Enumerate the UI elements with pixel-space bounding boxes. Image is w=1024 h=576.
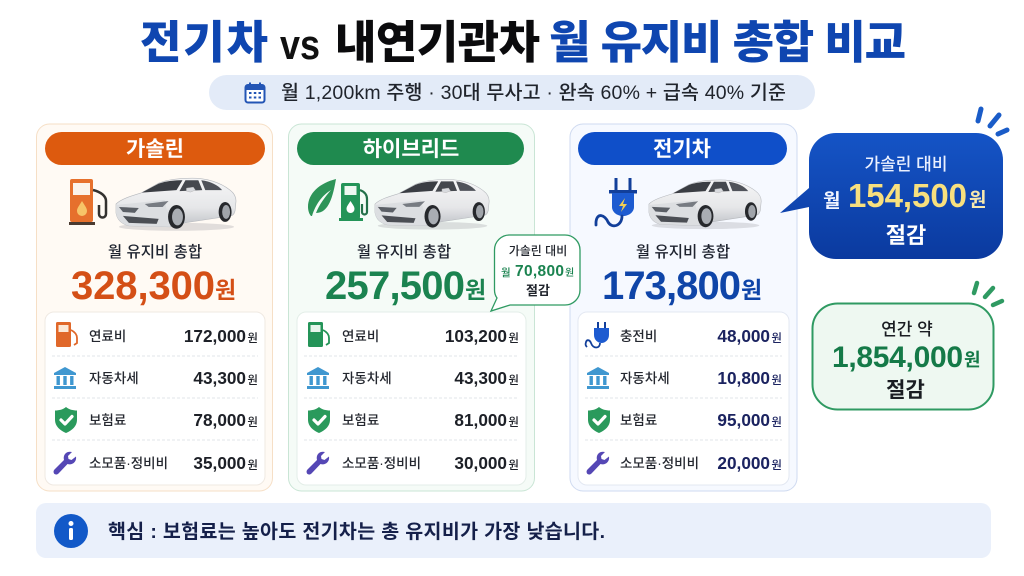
label: 월 유지비 총합: [357, 243, 451, 261]
row: insurance: [55, 407, 258, 433]
total electric: 173,800: [602, 264, 741, 308]
car image: [649, 180, 761, 229]
row: fuel: 원: [508, 331, 519, 345]
row: maintenance: [307, 452, 519, 475]
title: 월 유지비 총합 비교: [549, 17, 906, 68]
total gasoline: 328,300: [71, 264, 215, 308]
icon: plug: [596, 178, 637, 226]
row: insurance: 보험료: [342, 413, 379, 428]
row: charging: 충전비: [620, 329, 657, 344]
cost table electric: [578, 312, 789, 485]
callout: electric monthly saving: 절감: [886, 223, 926, 248]
row: charging: 원: [771, 331, 782, 345]
row: fuel: 연료비: [89, 329, 126, 344]
callout: hybrid saving: 가솔린 대비: [509, 244, 567, 258]
sparkle: green: [974, 283, 1002, 305]
callout: electric monthly saving: 월: [823, 190, 840, 212]
row: fuel: 원: [247, 331, 258, 345]
gasoline heading pill: 가솔린: [126, 138, 184, 161]
row: fuel: 연료비: [342, 329, 379, 344]
row: fuel: 103,200: [445, 326, 507, 346]
row: maintenance: 원: [247, 458, 258, 472]
row: car tax: 43,300: [454, 368, 507, 388]
row: car tax: 자동차세: [89, 371, 139, 386]
callout: electric monthly saving: 원: [969, 189, 986, 211]
sparkle: blue: [978, 109, 1007, 134]
icon: calendar: [246, 82, 264, 102]
row: car tax: 10,800: [717, 368, 770, 388]
row: car tax: [54, 367, 258, 389]
callout: electric monthly saving: 가솔린 대비: [865, 155, 947, 174]
row: maintenance: 소모품·정비비: [342, 456, 421, 471]
total electric: 원: [741, 277, 762, 303]
callout: hybrid saving: 절감: [526, 283, 550, 298]
row: insurance: 보험료: [89, 413, 126, 428]
panel: hybrid: [288, 124, 534, 491]
key takeaway bar: [36, 503, 991, 558]
row: insurance: [308, 407, 519, 433]
hybrid heading pill: 하이브리드: [363, 138, 459, 161]
icon: fuel pump: [69, 179, 106, 225]
row: insurance: 81,000: [454, 410, 507, 430]
callout: electric monthly saving: [780, 133, 1003, 259]
row: car tax: 자동차세: [620, 371, 670, 386]
total gasoline: 원: [215, 277, 236, 303]
subtitle text: 월 1,200km 주행 · 30대 무사고 · 완속 60% + 급속 40% 기준: [281, 82, 786, 104]
row: maintenance: 35,000: [193, 453, 246, 473]
row: car tax: 자동차세: [342, 371, 392, 386]
hybrid heading pill: [297, 132, 524, 165]
callout: annual saving: 원: [964, 350, 981, 370]
callout: hybrid saving: 원: [565, 266, 574, 279]
callout: hybrid saving: 월: [501, 267, 511, 279]
title: 전기차: [140, 17, 268, 68]
callout: hybrid saving: [491, 235, 580, 311]
row: charging: [586, 322, 782, 348]
label: 월 유지비 총합: [108, 243, 202, 261]
row: insurance: 78,000: [193, 410, 246, 430]
panel: electric: [570, 124, 797, 491]
title: vs: [280, 21, 320, 68]
callout: electric monthly saving: 154,500: [848, 177, 967, 214]
label: 월 유지비 총합: [636, 243, 730, 261]
row: maintenance: 원: [771, 458, 782, 472]
row: fuel: [56, 322, 258, 347]
row: car tax: 원: [247, 373, 258, 387]
title: [140, 17, 906, 68]
row: maintenance: 20,000: [717, 453, 770, 473]
row: maintenance: 원: [508, 458, 519, 472]
total hybrid: 원: [465, 277, 486, 303]
gasoline heading pill: [45, 132, 265, 165]
callout: hybrid saving: 70,800: [515, 263, 564, 280]
total hybrid: 257,500: [325, 264, 465, 308]
row: insurance: 원: [247, 415, 258, 429]
row: car tax: 43,300: [193, 368, 246, 388]
electric heading pill: [578, 132, 787, 165]
row: car tax: [307, 367, 519, 389]
row: maintenance: [54, 452, 258, 475]
icon: hybrid pump: [339, 183, 367, 221]
row: fuel: 172,000: [184, 326, 246, 346]
row: maintenance: 소모품·정비비: [620, 456, 699, 471]
car image: [116, 178, 236, 231]
panel: gasoline: [36, 124, 272, 491]
icon: info: [54, 514, 88, 548]
cost table gasoline: [45, 312, 265, 485]
row: charging: 48,000: [717, 326, 770, 346]
row: insurance: 원: [771, 415, 782, 429]
row: maintenance: 소모품·정비비: [89, 456, 168, 471]
title: 내연기관차: [335, 17, 540, 68]
callout: annual saving: 절감: [886, 379, 925, 402]
row: car tax: [587, 367, 782, 389]
row: insurance: 95,000: [717, 410, 770, 430]
callout: annual saving: [812, 304, 994, 410]
row: insurance: 원: [508, 415, 519, 429]
row: insurance: 보험료: [620, 413, 657, 428]
row: fuel: [308, 322, 519, 347]
row: insurance: [588, 407, 782, 433]
callout: annual saving: 연간 약: [881, 320, 933, 339]
row: car tax: 원: [508, 373, 519, 387]
electric heading pill: 전기차: [653, 138, 711, 161]
takeaway text: 핵심 : 보험료는 높아도 전기차는 총 유지비가 가장 낮습니다.: [108, 521, 605, 543]
callout: annual saving: 1,854,000: [832, 341, 963, 374]
icon: leaf: [308, 179, 336, 216]
row: car tax: 원: [771, 373, 782, 387]
subtitle condition bar: [209, 75, 815, 110]
row: maintenance: [587, 452, 782, 475]
car image: [375, 180, 489, 230]
row: maintenance: 30,000: [454, 453, 507, 473]
cost table hybrid: [297, 312, 526, 485]
